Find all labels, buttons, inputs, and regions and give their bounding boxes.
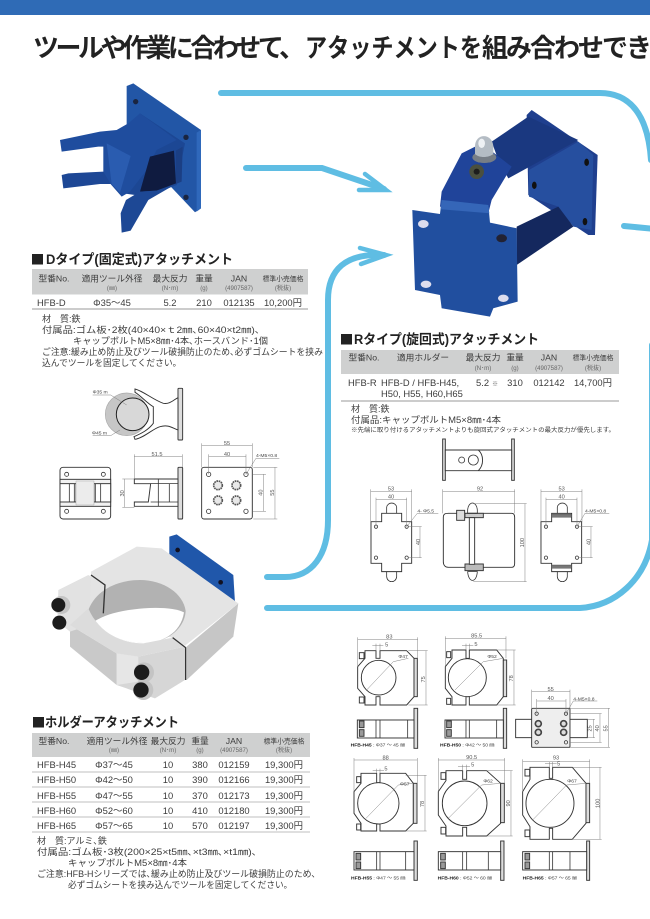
table: holder: 380 <box>192 759 208 770</box>
drawings: H55 H60 H65 dimensions: Φ57 <box>400 782 410 788</box>
table: holder: 10 <box>163 805 173 816</box>
notes: D type <box>42 313 323 368</box>
table: holder: HFB-H65 <box>37 820 76 831</box>
drawings: H55 H60 H65 dimensions: HFB-H65 : Φ57 ～ 65 ㎜ <box>523 875 577 881</box>
table: D type: JAN <box>231 274 247 284</box>
drawings: H45 H50 and plate dimensions: 40 <box>595 725 601 731</box>
heading: holder: ホルダーアタッチメント <box>45 714 179 730</box>
drawings: H45 H50 and plate dimensions: 78 <box>509 675 515 681</box>
photo: R type attachment <box>412 110 598 317</box>
notes: R type: 材 質:鉄 <box>351 403 390 414</box>
table: holder: 012180 <box>218 805 250 816</box>
table: holder: 最大反力 <box>151 735 185 746</box>
table: holder: 012173 <box>218 790 250 801</box>
table: D type: 10,200円 <box>264 297 302 308</box>
notes: R type <box>351 403 615 434</box>
table: D type: (N･m) <box>162 285 178 292</box>
table: R type: 最大反力 <box>466 352 500 362</box>
table: R type: (N･m) <box>475 365 491 372</box>
notes: D type: ご注意:緩み止め防止及びツール破損防止のため､必ずゴムシートを挟み <box>42 346 323 357</box>
drawings: R type dimensions: 4- Φ5.5 <box>417 508 434 514</box>
drawings: H45 H50 and plate dimensions <box>351 634 610 749</box>
table: holder: JAN <box>226 736 242 746</box>
notes: holder <box>37 835 316 890</box>
drawings: H55 H60 H65 dimensions: 90.5 <box>466 755 477 761</box>
table: holder: (N･m) <box>160 747 176 754</box>
table: holder: 19,300円 <box>265 805 303 816</box>
drawings: R type dimensions: 40 <box>558 495 565 501</box>
table: holder: 10 <box>163 790 173 801</box>
drawings: D type dimensions: Φ35 m <box>93 390 108 396</box>
table: holder: 19,300円 <box>265 790 303 801</box>
table: holder: 10 <box>163 774 173 785</box>
panel: holder spec <box>32 714 316 890</box>
table: R type: 310 <box>507 377 523 388</box>
title <box>33 33 650 63</box>
heading: D type: Dタイプ(固定式)アタッチメント <box>46 251 233 267</box>
table: R type: 標準小売価格 <box>573 353 614 362</box>
table: holder: 型番No. <box>39 735 69 746</box>
panel: D type spec <box>32 251 323 368</box>
drawings: H45 H50 and plate dimensions: 55 <box>547 687 554 693</box>
table: holder: (g) <box>196 747 204 754</box>
table: D type: (4907587) <box>225 285 253 292</box>
drawings: D type dimensions <box>60 388 279 519</box>
notes: R type: ※先端に取り付けるアタッチメントよりも旋回式アタッチメントの最大反力が優先します。 <box>351 426 615 434</box>
table: D type: 適用ツール外径 <box>82 272 143 284</box>
drawings: H55 H60 H65 dimensions: HFB-H55 : Φ47 ～ 55 ㎜ <box>351 875 405 881</box>
drawings: H55 H60 H65 dimensions: 78 <box>420 801 426 807</box>
table: holder: HFB-H50 <box>37 774 76 785</box>
drawings: H45 H50 and plate dimensions: 55 <box>603 725 609 731</box>
drawings: R type dimensions: 92 <box>477 487 483 493</box>
table: R type: JAN <box>541 352 557 362</box>
table: holder: 19,300円 <box>265 774 303 785</box>
title: アタッチメントを <box>305 33 482 63</box>
arrows: flow between attachments <box>221 93 650 608</box>
table: D type <box>32 269 308 310</box>
drawings: H55 H60 H65 dimensions: HFB-H60 : Φ52 ～ 60 ㎜ <box>438 875 492 881</box>
drawings: H55 H60 H65 dimensions: 90 <box>506 800 512 806</box>
drawings: H55 H60 H65 dimensions <box>351 755 602 881</box>
drawings: H45 H50 and plate dimensions: 5 <box>474 642 478 648</box>
table: D type: 重量 <box>195 272 213 284</box>
drawings: H45 H50 and plate dimensions: HFB-H45 : Φ37 ～ 45 ㎜ <box>351 743 405 749</box>
table: D type: 標準小売価格 <box>263 274 304 283</box>
table: holder: 19,300円 <box>265 759 303 770</box>
table: holder: 10 <box>163 820 173 831</box>
drawings: D type dimensions: 4-M5×0.8 <box>256 453 277 459</box>
drawings: D type dimensions: 30 <box>120 490 126 496</box>
drawings: H45 H50 and plate dimensions: 25 <box>588 725 594 731</box>
drawings: H55 H60 H65 dimensions: Φ67 <box>567 778 577 784</box>
drawings: R type dimensions: 40 <box>587 539 593 545</box>
table: D type: 012135 <box>223 297 255 308</box>
drawings: H45 H50 and plate dimensions: 85.5 <box>471 634 482 640</box>
table: R type: 重量 <box>506 352 524 362</box>
drawings: D type dimensions: Φ45 m <box>92 430 107 436</box>
drawings: D type dimensions: 55 <box>224 441 230 447</box>
table: holder: 410 <box>192 805 208 816</box>
title: ツールや作業に合わせて、 <box>33 33 305 63</box>
table: holder: 390 <box>192 774 208 785</box>
notes: R type: 付属品:キャップボルトM5×8㎜･4本 <box>351 414 501 425</box>
notes: holder: 付属品:ゴム板･3枚(200×25×t5㎜､×t3㎜､×t1㎜)､ <box>37 846 257 857</box>
table: R type: 型番No. <box>349 352 379 362</box>
table: D type: 5.2 <box>163 297 177 308</box>
table: R type: (4907587) <box>535 365 563 372</box>
drawings: H45 H50 and plate dimensions: 5 <box>385 643 388 649</box>
drawings: R type dimensions: 53 <box>388 487 394 493</box>
drawings: H45 H50 and plate dimensions: 83 <box>386 634 392 640</box>
drawings: D type dimensions: 40 <box>258 490 264 496</box>
photo: holder attachment <box>51 534 238 700</box>
drawings: H45 H50 and plate dimensions: 4-M5×0.8 <box>573 696 595 702</box>
table: holder: (㎜) <box>109 747 119 754</box>
table: holder: (4907587) <box>220 747 248 754</box>
heading: R type: Rタイプ(旋回式)アタッチメント <box>354 331 539 347</box>
table: D type: HFB-D <box>37 297 66 308</box>
table: holder: HFB-H60 <box>37 805 76 816</box>
table: D type: 型番No. <box>39 272 69 284</box>
drawings: H45 H50 and plate dimensions: Φ47 <box>398 654 408 660</box>
top header bar <box>0 0 650 15</box>
photo: D type attachment <box>60 83 201 233</box>
panel: R type spec <box>341 331 619 434</box>
drawings: R type dimensions <box>371 439 609 582</box>
table: holder: 重量 <box>191 735 209 746</box>
notes: holder: 必ずゴムシートを挟み込んでツールを固定してください｡ <box>68 879 288 890</box>
table: holder: Φ42～50 <box>95 774 133 785</box>
notes: D type: 付属品:ゴム板･2枚(40×40×ｔ2㎜､60×40×t2㎜)､ <box>42 324 260 335</box>
drawings: R type dimensions: 40 <box>416 539 422 545</box>
drawings: H45 H50 and plate dimensions: 40 <box>547 696 554 702</box>
table: holder: 19,300円 <box>265 820 303 831</box>
table: R type: 14,700円 <box>574 377 612 388</box>
drawings: D type dimensions: 51.5 <box>151 452 162 458</box>
table: holder: Φ47～55 <box>95 790 133 801</box>
table: holder: 570 <box>192 820 208 831</box>
drawings: H55 H60 H65 dimensions: 100 <box>595 799 601 808</box>
table: D type: (㎜) <box>107 285 117 292</box>
table: D type: (税抜) <box>275 284 291 292</box>
drawings: R type dimensions: 4-M5×0.8 <box>585 508 606 514</box>
table: D type: Φ35～45 <box>93 297 131 308</box>
notes: holder: キャップボルトM5×8㎜･4本 <box>68 857 187 868</box>
table: holder: Φ57～65 <box>95 820 133 831</box>
drawings: R type dimensions: 53 <box>558 487 565 493</box>
table: holder: 012197 <box>218 820 250 831</box>
drawings: H55 H60 H65 dimensions: 5 <box>384 767 388 773</box>
table: R type: HFB-R <box>348 377 377 388</box>
table: holder: 370 <box>192 790 208 801</box>
drawings: H45 H50 and plate dimensions: HFB-H50 : Φ42 ～ 50 ㎜ <box>440 743 494 749</box>
table: D type: 最大反力 <box>153 272 187 284</box>
drawings: H55 H60 H65 dimensions: 88 <box>383 755 389 761</box>
table: holder: 適用ツール外径 <box>87 735 148 746</box>
table: R type: (g) <box>511 365 519 372</box>
table: R type: ※ <box>492 381 498 388</box>
table: holder <box>32 733 310 832</box>
table: holder: Φ37～45 <box>95 759 133 770</box>
drawings: H55 H60 H65 dimensions: 5 <box>557 762 560 768</box>
drawings: D type dimensions: 55 <box>270 490 276 496</box>
drawings: H45 H50 and plate dimensions: Φ52 <box>487 654 497 660</box>
table: R type: 012142 <box>533 377 565 388</box>
table: holder: HFB-H45 <box>37 759 76 770</box>
drawings: H45 H50 and plate dimensions: 75 <box>421 676 427 682</box>
table: R type: H50, H55, H60,H65 <box>381 388 463 399</box>
table: D type: (g) <box>200 285 208 292</box>
table: holder: (税抜) <box>276 746 292 754</box>
drawings: R type dimensions: 40 <box>388 495 394 501</box>
notes: D type: キャップボルトM5×8㎜･4本､ホースバンド･1個 <box>73 335 268 346</box>
table: R type: HFB-D / HFB-H45, <box>381 377 459 388</box>
table: holder: 標準小売価格 <box>264 736 305 746</box>
table: holder: HFB-H55 <box>37 790 76 801</box>
table: R type: (税抜) <box>585 364 601 372</box>
drawings: H55 H60 H65 dimensions: 5 <box>471 763 474 769</box>
table: D type: 210 <box>196 297 212 308</box>
table: holder: 012159 <box>218 759 250 770</box>
notes: holder: ご注意:HFB-Hシリーズでは､緩み止め防止及びツール破損防止のため､ <box>37 868 316 879</box>
table: R type: 適用ホルダー <box>397 352 449 362</box>
table: R type: 5.2 <box>476 377 489 388</box>
table: holder: Φ52～60 <box>95 805 133 816</box>
drawings: H55 H60 H65 dimensions: 93 <box>553 756 559 762</box>
notes: D type: 込んでツールを固定してください｡ <box>42 358 177 368</box>
drawings: R type dimensions: 100 <box>520 538 526 547</box>
notes: D type: 材 質:鉄 <box>42 313 81 324</box>
drawings: H55 H60 H65 dimensions: Φ62 <box>483 778 493 784</box>
table: holder: 10 <box>163 759 173 770</box>
table: holder: 012166 <box>218 774 250 785</box>
drawings: D type dimensions: 40 <box>224 452 230 458</box>
table: R type <box>341 350 619 402</box>
notes: holder: 材 質:アルミ､鉄 <box>37 835 107 846</box>
